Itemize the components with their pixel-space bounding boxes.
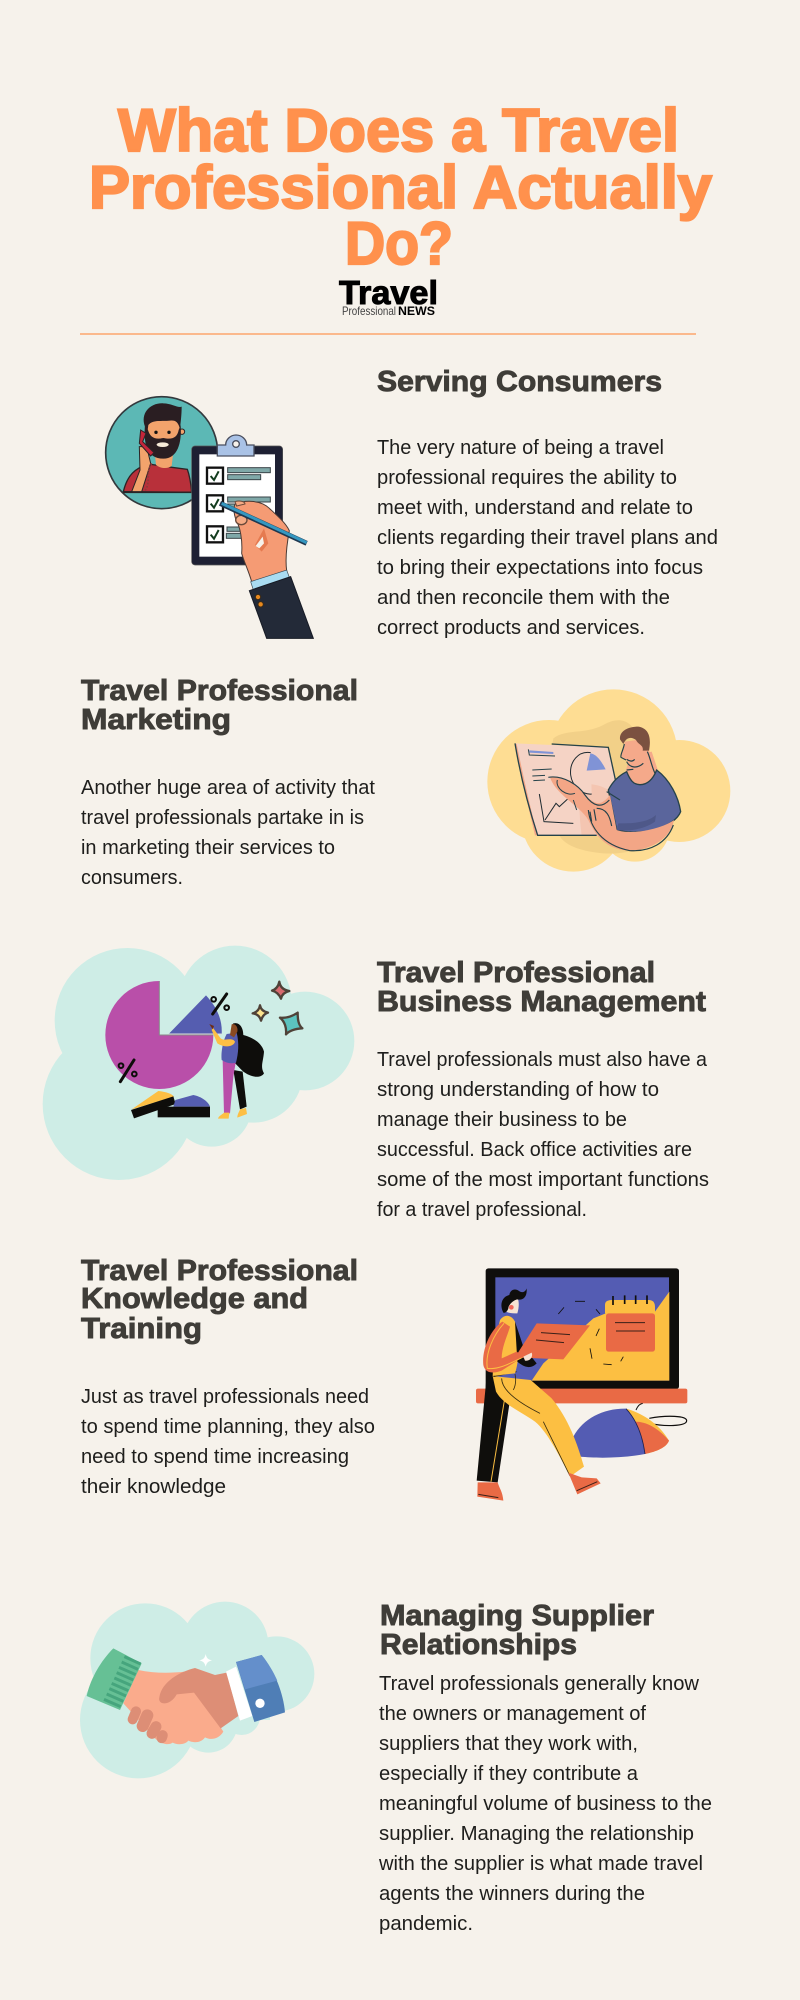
text block: Managing Supplier Relationships: with the supplier is what made travel (378, 1853, 703, 1875)
heading: Travel Professional Business Management (377, 957, 706, 1018)
text block: Serving Consumers: The very nature of being a travel (377, 437, 664, 459)
heading: Travel Professional Business Management: Business Management (377, 986, 706, 1018)
text block: Business Management: for a travel professional. (377, 1199, 587, 1221)
text block: Managing Supplier Relationships: Travel professionals generally know (379, 1673, 700, 1695)
text block: Managing Supplier Relationships (378, 1673, 712, 1935)
text block: Business Management: manage their business to be (377, 1109, 627, 1131)
text block: Serving Consumers: and then reconcile them with the (377, 587, 670, 609)
icon: percent sign bottom (119, 1060, 137, 1082)
title: Do? (345, 210, 453, 277)
heading: Managing Supplier Relationships: Managing Supplier (380, 1600, 654, 1632)
heading: Travel Professional Knowledge and Training: Knowledge and (81, 1283, 308, 1315)
logo: Travel Professional News: Professional (342, 304, 396, 318)
text block: Knowledge and Training: to spend time planning, they also (81, 1416, 375, 1438)
text block: Business Management: strong understanding of how to (377, 1079, 659, 1101)
text block: Knowledge and Training: their knowledge (81, 1476, 226, 1498)
text block: Serving Consumers: professional requires the ability to (377, 467, 677, 489)
text block: Knowledge and Training: need to spend time increasing (81, 1446, 349, 1468)
text block: Managing Supplier Relationships: agents the winners during the (379, 1883, 645, 1905)
text block: Business Management: successful. Back office activities are (377, 1139, 692, 1161)
heading: Serving Consumers: Serving Consumers (377, 366, 662, 398)
icon: percent sign top (211, 994, 229, 1014)
illustration: handshake on mint cloud (80, 1602, 314, 1778)
heading: Managing Supplier Relationships (380, 1600, 654, 1661)
text block: Knowledge and Training (81, 1386, 375, 1498)
text block: Managing Supplier Relationships: especially if they contribute a (379, 1763, 639, 1785)
text block: Marketing: in marketing their services to (81, 837, 335, 859)
text block: Managing Supplier Relationships: meaningful volume of business to the (379, 1793, 712, 1815)
text block: Serving Consumers: correct products and services. (377, 617, 645, 639)
title (89, 97, 713, 277)
text block: Managing Supplier Relationships: supplier. Managing the relationship (379, 1823, 694, 1845)
text block: Marketing: travel professionals partake in is (81, 807, 364, 829)
heading: Travel Professional Knowledge and Training: Training (81, 1313, 202, 1345)
text block: Managing Supplier Relationships: the owners or management of (379, 1703, 646, 1725)
text block: Serving Consumers: to bring their expectations into focus (377, 557, 703, 579)
illustration: man on phone and checklist (106, 397, 313, 638)
text block: Marketing: Another huge area of activity that (81, 777, 375, 799)
text block: Business Management (377, 1049, 709, 1221)
text block: Serving Consumers: clients regarding their travel plans and (377, 527, 718, 549)
text block: Business Management: Travel professionals must also have a (377, 1049, 708, 1071)
title: Professional Actually (89, 154, 713, 221)
text block: Marketing: consumers. (81, 867, 183, 889)
heading: Travel Professional Marketing: Travel Professional (81, 675, 358, 707)
heading: Travel Professional Knowledge and Training: Travel Professional (81, 1255, 358, 1287)
heading: Managing Supplier Relationships: Relationships (380, 1629, 577, 1661)
text block: Serving Consumers (377, 437, 718, 639)
text block: Managing Supplier Relationships: suppliers that they work with, (379, 1733, 638, 1755)
title: What Does a Travel (118, 97, 679, 164)
text block: Knowledge and Training: Just as travel professionals need (81, 1386, 369, 1408)
heading: Travel Professional Marketing: Marketing (81, 704, 231, 736)
icon: sparkles (253, 982, 302, 1034)
logo: Travel Professional News: NEWS (398, 304, 435, 318)
illustration: person with monitor, calendar and mouse (476, 1268, 687, 1501)
text block: Serving Consumers: meet with, understand and relate to (377, 497, 693, 519)
text block: Managing Supplier Relationships: pandemic. (379, 1913, 473, 1935)
heading: Travel Professional Business Management: Travel Professional (377, 957, 655, 989)
text block: Marketing (81, 777, 375, 889)
heading: Travel Professional Knowledge and Training (81, 1255, 358, 1345)
logo: Travel Professional News: Travel (339, 274, 438, 311)
illustration: woman with pie chart on mint cloud (43, 946, 354, 1180)
illustration: man pointing at chart on yellow cloud (487, 689, 730, 872)
heading: Travel Professional Marketing (81, 675, 358, 736)
text block: Business Management: some of the most important functions (377, 1169, 709, 1191)
